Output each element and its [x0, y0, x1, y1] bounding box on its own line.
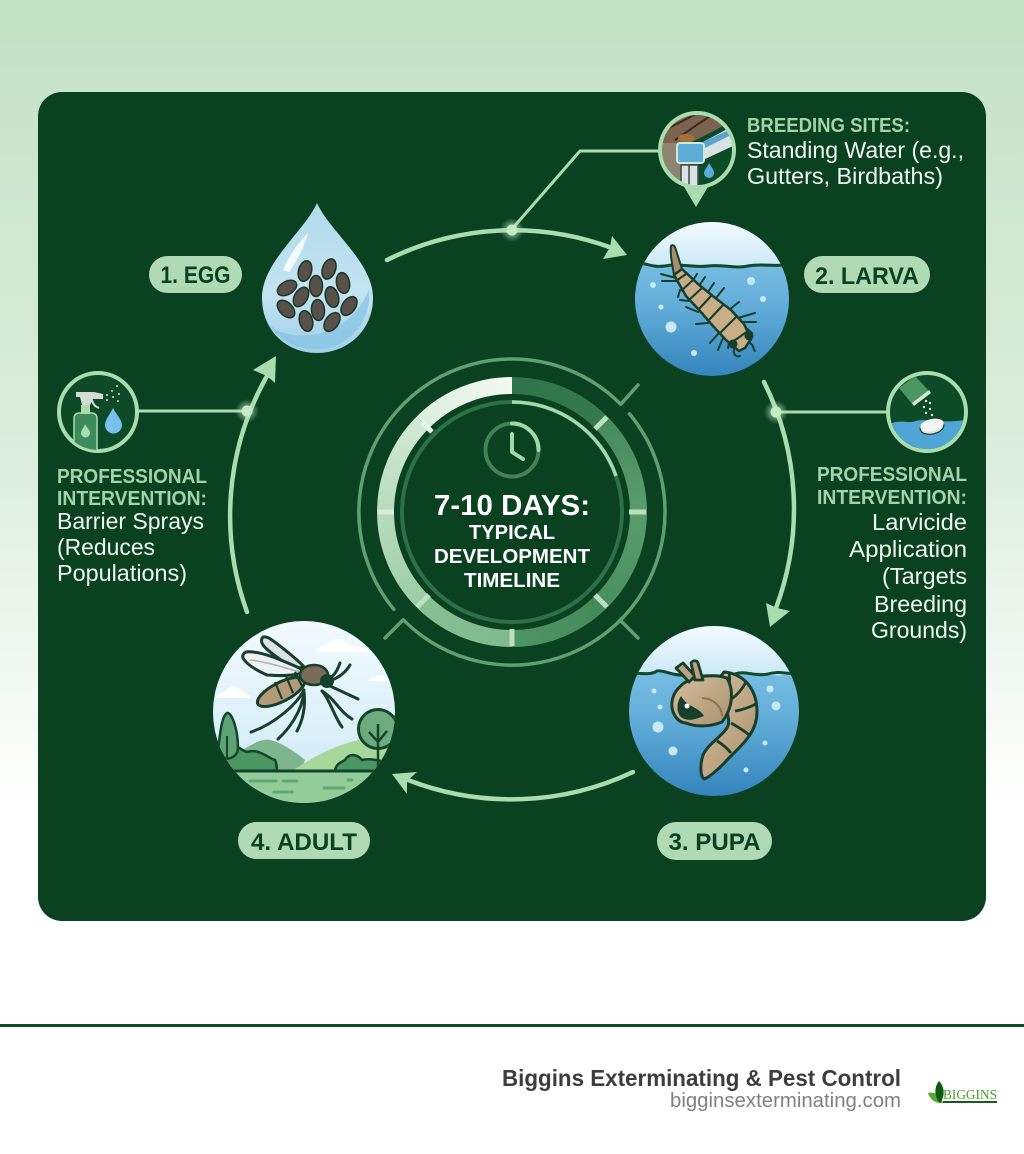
central timeline dial — [359, 359, 665, 665]
breeding sites text: BREEDING SITES: — [747, 115, 910, 137]
stage 3 label: 3. PUPA — [668, 829, 760, 856]
larvicide text: Grounds) — [871, 617, 967, 643]
stage 4 label — [238, 822, 370, 859]
footer logo: BIGGINS — [943, 1088, 997, 1103]
timeline text: DEVELOPMENT — [434, 546, 590, 568]
footer band — [0, 1024, 1024, 1154]
arrow: egg to larva — [387, 230, 627, 260]
larvicide text — [817, 464, 967, 643]
timeline text — [434, 490, 590, 592]
timeline text: 7-10 DAYS: — [434, 490, 590, 522]
pupa tail — [701, 672, 757, 779]
icon: spray bottle — [59, 373, 137, 458]
barrier sprays text: Barrier Sprays — [57, 508, 204, 534]
stage 2 label: 2. LARVA — [815, 263, 919, 290]
larvicide text: Application — [849, 536, 967, 562]
breeding sites text: Gutters, Birdbaths) — [747, 163, 943, 189]
mosquito — [243, 637, 358, 739]
connector: breeding sites — [500, 151, 662, 242]
inner ring — [402, 402, 622, 622]
pupa head — [672, 676, 731, 726]
breeding sites text: Standing Water (e.g., — [747, 137, 964, 163]
barrier sprays text: INTERVENTION: — [57, 488, 207, 510]
barrier sprays text: (Reduces — [57, 534, 155, 560]
footer logo — [928, 1081, 997, 1103]
larvicide text: INTERVENTION: — [817, 487, 967, 509]
timeline text: TIMELINE — [464, 570, 560, 592]
larvicide text: PROFESSIONAL — [817, 464, 967, 486]
segmented progress ring — [378, 386, 646, 646]
larvicide text: Breeding — [874, 591, 967, 617]
connector: larvicide — [764, 400, 888, 424]
barrier sprays text: PROFESSIONAL — [57, 466, 207, 488]
footer company text: Biggins Exterminating & Pest Control — [502, 1065, 901, 1091]
stage 2 label — [804, 256, 930, 293]
cycle arrows — [230, 230, 794, 799]
arrow: adult to egg — [230, 356, 276, 612]
arrow: pupa to adult — [392, 772, 633, 799]
outer thin ring — [359, 359, 665, 665]
breeding sites text — [747, 115, 964, 189]
larvicide text: Larvicide — [872, 509, 967, 535]
stage 1 label: 1. EGG — [160, 262, 230, 289]
footer company text: bigginsexterminating.com — [670, 1090, 901, 1112]
stage 3 label — [657, 822, 772, 860]
barrier sprays text: Populations) — [57, 560, 187, 586]
timeline text: TYPICAL — [469, 522, 555, 544]
larvicide text: (Targets — [882, 563, 967, 589]
arrow: larva to pupa — [764, 382, 794, 627]
connector: barrier sprays — [138, 399, 259, 423]
stage 4 label: 4. ADULT — [251, 829, 357, 856]
stage 1 label — [149, 256, 242, 293]
icon: larvicide tablet — [888, 373, 966, 460]
icon: clock — [486, 424, 538, 476]
barrier sprays text — [57, 466, 207, 586]
landscape — [244, 740, 305, 770]
stage 2 icon: larva — [630, 222, 795, 376]
panel: life cycle card — [38, 92, 986, 921]
stage 4 icon: adult mosquito scene — [213, 621, 398, 804]
stage 3 icon: pupa — [625, 626, 805, 796]
stage 1 icon: egg drop — [262, 203, 373, 353]
footer company text — [502, 1065, 901, 1112]
icon: gutter breeding site — [660, 112, 735, 207]
